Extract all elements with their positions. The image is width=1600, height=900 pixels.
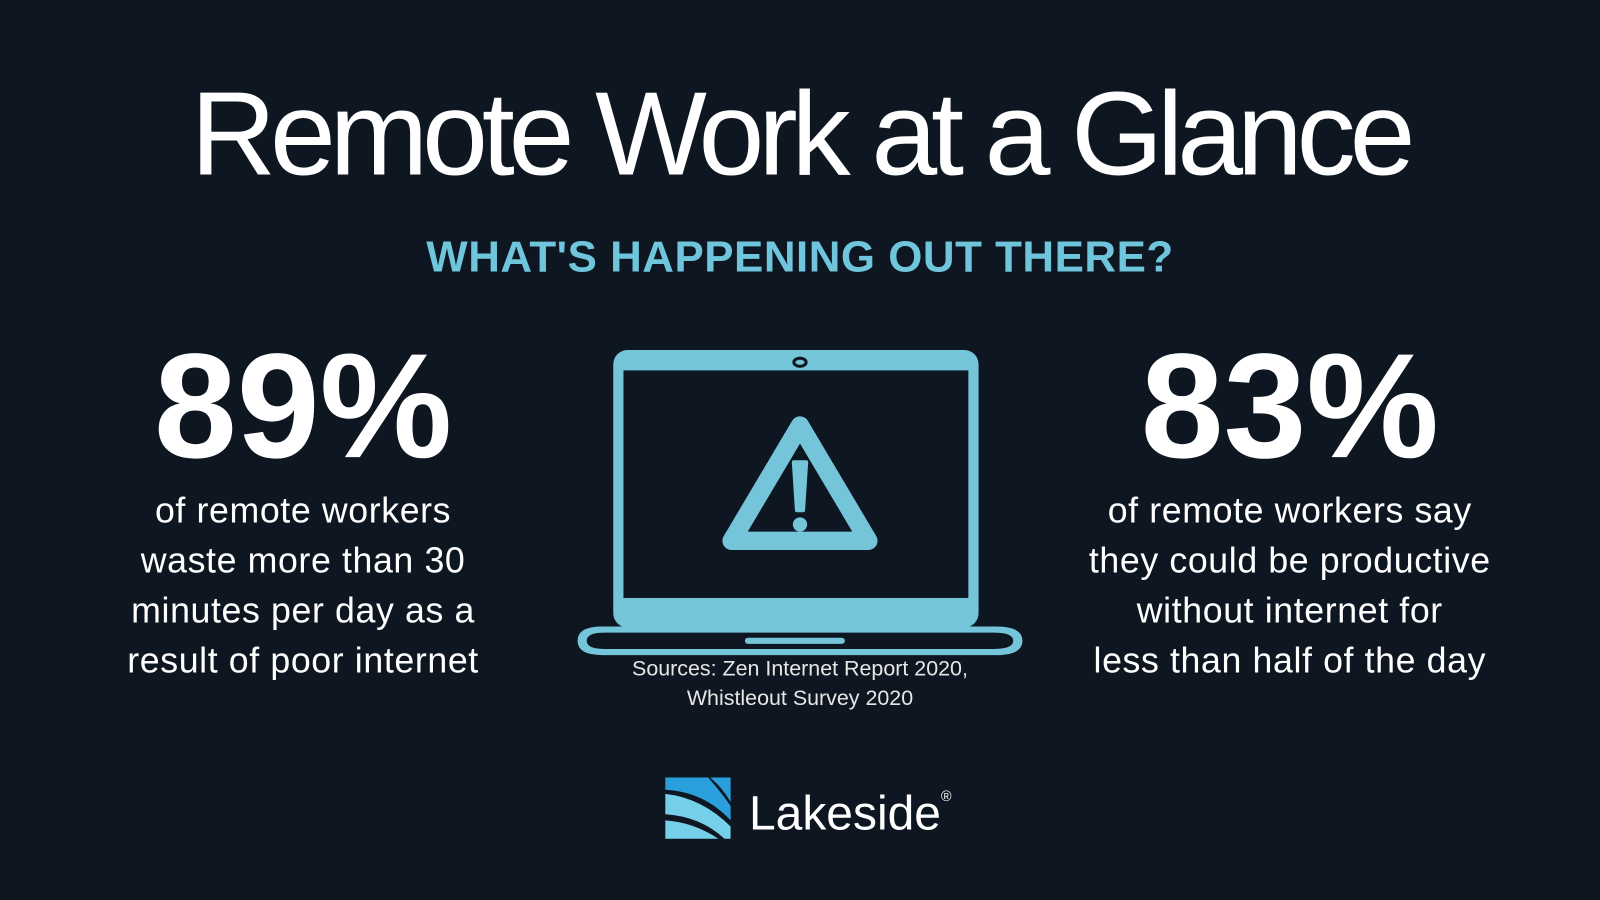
description left: waste more than 30 xyxy=(141,541,465,581)
icon: lakeside mark xyxy=(665,778,731,839)
description right: without internet for xyxy=(1137,591,1443,631)
description left: result of poor internet xyxy=(127,641,479,681)
sources xyxy=(632,657,968,710)
number 83%: 83% xyxy=(1141,322,1439,489)
brand name: Lakeside® xyxy=(749,786,951,840)
description right: less than half of the day xyxy=(1094,641,1486,681)
number 89%: 89% xyxy=(154,322,452,489)
description right: they could be productive xyxy=(1089,541,1491,581)
stat right xyxy=(1089,322,1491,681)
logo xyxy=(665,778,952,840)
description left: of remote workers xyxy=(155,491,451,531)
sources: Whistleout Survey 2020 xyxy=(687,687,913,710)
subtitle: WHAT'S HAPPENING OUT THERE? xyxy=(426,233,1174,282)
description left: minutes per day as a xyxy=(131,591,475,631)
description left xyxy=(127,491,479,681)
description right xyxy=(1089,491,1491,681)
sources: Sources: Zen Internet Report 2020, xyxy=(632,657,968,681)
title: Remote Work at a Glance xyxy=(191,67,1409,200)
description right: of remote workers say xyxy=(1108,491,1472,531)
stat left xyxy=(127,322,479,681)
